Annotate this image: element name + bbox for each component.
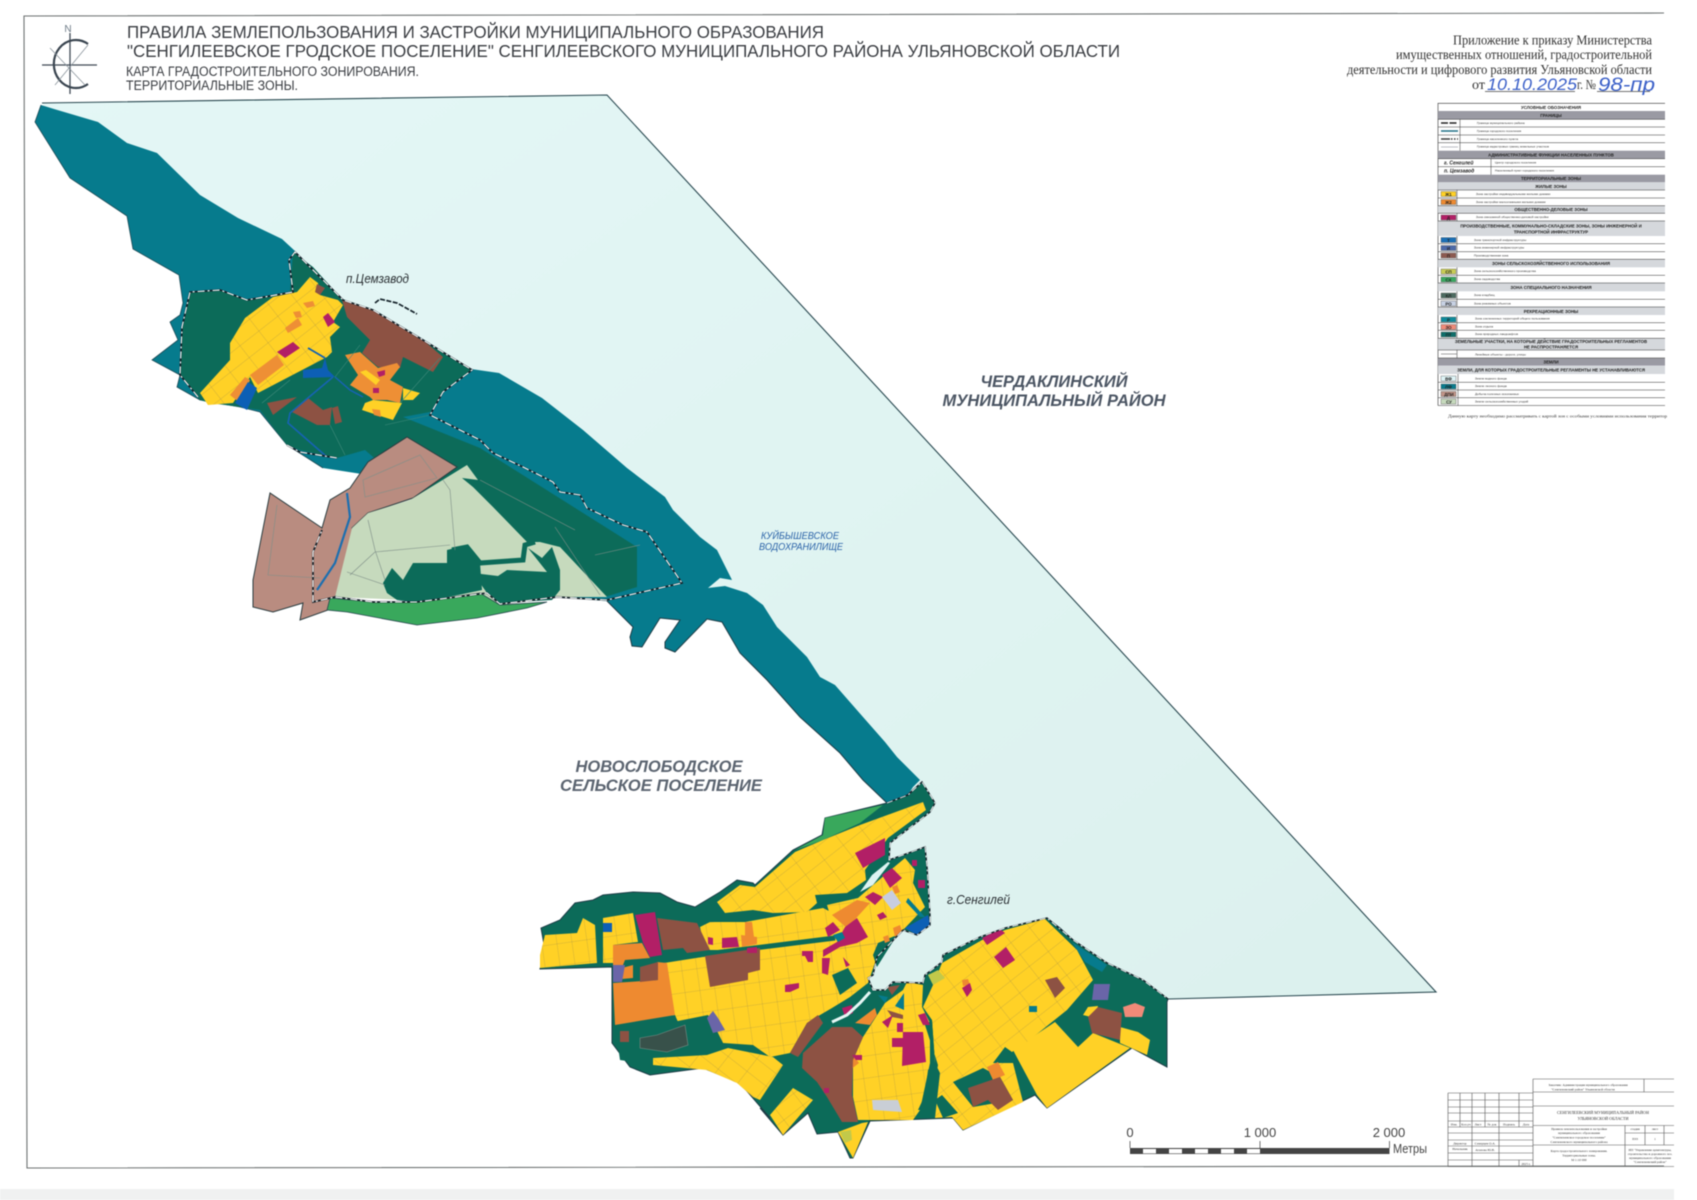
title block text: ИП "Управление архитектуры, bbox=[1628, 1148, 1672, 1153]
title block text: Дата bbox=[1523, 1122, 1530, 1126]
legend swatch codes: Ж1 bbox=[1444, 192, 1452, 197]
legend settlement names bbox=[1444, 160, 1474, 174]
legend swatch codes bbox=[1444, 192, 1454, 404]
legend descriptions: Линейные объекты - дороги, улицы bbox=[1475, 352, 1527, 356]
title block text: Заказчик: Администрация муниципального образования bbox=[1548, 1083, 1628, 1087]
legend headings: ЗЕМЕЛЬНЫЕ УЧАСТКИ, НА КОТОРЫЕ ДЕЙСТВИЕ ГРАДОСТРОИТЕЛЬНЫХ РЕГЛАМЕНТОВ bbox=[1455, 339, 1647, 344]
gardening zone north bbox=[795, 805, 883, 850]
legend settlement names: п. Цемзавод bbox=[1444, 168, 1474, 174]
river line through town bbox=[832, 992, 870, 1022]
river bbox=[317, 493, 350, 590]
logo compass mark: N bbox=[64, 24, 72, 35]
label: п.Цемзавод: п.Цемзавод bbox=[346, 271, 409, 286]
legend swatch codes: Ж2 bbox=[1444, 200, 1452, 205]
title block text: муниципального образования bbox=[1558, 1131, 1600, 1135]
legend swatch codes: Р bbox=[1447, 318, 1450, 322]
legend swatch codes: ДПИ bbox=[1444, 392, 1454, 397]
legend descriptions: Зона отдыха bbox=[1475, 324, 1493, 328]
title block text: 2025 г. bbox=[1521, 1162, 1531, 1166]
scale bar: 0 bbox=[1126, 1125, 1134, 1140]
legend swatch codes: И bbox=[1447, 246, 1450, 251]
title block text: М 1:10 000 bbox=[1571, 1158, 1587, 1162]
legend swatch codes: ВФ bbox=[1445, 376, 1452, 382]
legend swatch codes: СУ bbox=[1446, 400, 1452, 404]
title bbox=[126, 21, 1120, 93]
legend table bbox=[1438, 103, 1665, 406]
public crimson blocks bbox=[635, 838, 1015, 1093]
residential zone bbox=[200, 277, 343, 405]
label: г.Сенгилей: г.Сенгилей bbox=[947, 892, 1010, 907]
title block text: стадия bbox=[1630, 1127, 1640, 1131]
approval note: Приложение к приказу Министерства bbox=[1453, 34, 1653, 48]
access lines in south reserve bbox=[268, 455, 640, 595]
bottom scan band bbox=[0, 1189, 1674, 1200]
title block text: "Сенгилеевский район" bbox=[1633, 1160, 1667, 1164]
label: reservoir bbox=[759, 529, 844, 553]
legend headings: ЗЕМЛИ, ДЛЯ КОТОРЫХ ГРАДОСТРОИТЕЛЬНЫЕ РЕГЛАМЕНТЫ НЕ УСТАНАВЛИВАЮТСЯ bbox=[1457, 368, 1645, 372]
legend descriptions: Зона сельскохозяйственного производства bbox=[1474, 269, 1536, 273]
nature landscape zone bbox=[180, 252, 637, 597]
forest lobe west bbox=[383, 545, 482, 603]
label: Новослободское поселение: НОВОСЛОБОДСКОЕ bbox=[576, 757, 743, 776]
legend swatch codes: ЛФ bbox=[1445, 384, 1452, 390]
legend headings: УСЛОВНЫЕ ОБОЗНАЧЕНИЯ bbox=[1521, 105, 1581, 110]
legend descriptions: Граница населенного пункта bbox=[1477, 137, 1518, 141]
title block text bbox=[1451, 1083, 1672, 1166]
title block text: Сенгилеевского муниципального района bbox=[1550, 1140, 1608, 1144]
title block text: Самарцев О.А. bbox=[1475, 1142, 1496, 1146]
legend descriptions: Зона транспортной инфраструктуры bbox=[1474, 238, 1527, 242]
residential blocks bbox=[540, 802, 1150, 1158]
forest fund outer edge bbox=[607, 601, 887, 803]
title block text: Подпись bbox=[1503, 1122, 1516, 1126]
scale bar: 2 000 bbox=[1373, 1125, 1405, 1140]
legend descriptions bbox=[1474, 121, 1554, 404]
legend headings: РЕКРЕАЦИОННЫЕ ЗОНЫ bbox=[1524, 309, 1578, 314]
Сенгилей zones bbox=[540, 802, 1150, 1158]
legend descriptions: Добыча полезных ископаемых bbox=[1475, 392, 1519, 396]
approval note: 98-пр bbox=[1598, 75, 1655, 96]
title block text: строительства и дорожного хоз. bbox=[1628, 1152, 1672, 1156]
legend column lines bbox=[1457, 119, 1491, 406]
title block text: муниципального образования bbox=[1629, 1156, 1671, 1160]
label: Новослободское поселение bbox=[560, 757, 763, 795]
road bbox=[625, 938, 835, 964]
recreation pink block bbox=[1123, 1003, 1145, 1017]
brown production zone bbox=[342, 300, 443, 372]
legend descriptions: Граница муниципального района bbox=[1477, 121, 1525, 125]
title: ПРАВИЛА ЗЕМЛЕПОЛЬЗОВАНИЯ И ЗАСТРОЙКИ МУНИЦИПАЛЬНОГО ОБРАЗОВАНИЯ bbox=[127, 21, 824, 42]
title block text: Карта градостроительного зонирования. bbox=[1551, 1149, 1608, 1153]
label: Новослободское поселение: СЕЛЬСКОЕ ПОСЕЛЕНИЕ bbox=[560, 776, 763, 795]
street grids bbox=[540, 802, 1093, 1135]
brown production blocks bbox=[620, 918, 1122, 1122]
title block text: Изм. bbox=[1451, 1122, 1457, 1126]
title block text: лист bbox=[1652, 1127, 1659, 1131]
legend swatch codes: ПТ bbox=[1446, 332, 1452, 338]
title block text: Территориальные зоны. bbox=[1562, 1154, 1596, 1158]
legend colour swatches bbox=[1441, 192, 1456, 404]
approval note: от bbox=[1472, 78, 1485, 93]
title block text: СЕНГИЛЕЕВСКИЙ МУНИЦИПАЛЬНЫЙ РАЙОН bbox=[1557, 1110, 1649, 1115]
legend swatch codes: Т bbox=[1447, 238, 1450, 243]
approval note bbox=[1347, 34, 1655, 96]
legend headings: ЖИЛЫЕ ЗОНЫ bbox=[1534, 184, 1567, 189]
title block text: "Сенгилеевский район" Ульяновской области bbox=[1551, 1088, 1615, 1092]
legend headings: ТРАНСПОРТНОЙ ИНФРАСТРУКТУР bbox=[1514, 230, 1588, 234]
legend descriptions: Центр городского поселения bbox=[1495, 160, 1536, 164]
forest fund west edge bbox=[35, 105, 323, 468]
title: ТЕРРИТОРИАЛЬНЫЕ ЗОНЫ. bbox=[126, 78, 298, 93]
title block text: Начальник bbox=[1452, 1147, 1468, 1151]
label: Чердаклинский район: МУНИЦИПАЛЬНЫЙ РАЙОН bbox=[942, 390, 1166, 410]
drawing title block bbox=[1448, 1079, 1674, 1166]
gardening zone south bbox=[327, 593, 547, 625]
forest fund along the shore bbox=[35, 105, 920, 803]
title block text: Кол.уч bbox=[1461, 1122, 1471, 1126]
legend descriptions: Населенный пункт городского поселения bbox=[1495, 168, 1554, 172]
label: Чердаклинский район bbox=[942, 371, 1166, 410]
legend headings: ЗЕМЛИ bbox=[1543, 360, 1559, 364]
legend descriptions: Земли водного фонда bbox=[1475, 376, 1507, 380]
legend headings: ГРАНИЦЫ bbox=[1540, 113, 1562, 118]
inlet bbox=[860, 862, 890, 892]
orange residential bbox=[613, 885, 1005, 1080]
legend headings: АДМИНИСТРАТИВНЫЕ ФУНКЦИИ НАСЕЛЕННЫХ ПУНКТОВ bbox=[1488, 152, 1614, 158]
Сенгилей base area bbox=[540, 782, 1168, 1158]
title block text: ПЗЗ bbox=[1632, 1137, 1638, 1141]
public zones bbox=[277, 342, 300, 358]
legend swatch codes: П bbox=[1447, 254, 1450, 258]
legend descriptions: Зона застройки малоэтажными жилыми домами bbox=[1476, 200, 1546, 204]
legend descriptions: Зона инженерной инфраструктуры bbox=[1474, 246, 1525, 250]
legend descriptions: Зона кладбищ bbox=[1474, 293, 1495, 297]
legend settlement names: г. Сенгилей bbox=[1444, 160, 1473, 166]
approval note: имущественных отношений, градостроительной bbox=[1396, 48, 1652, 63]
legend row lines bbox=[1438, 119, 1665, 406]
legend headings: ОБЩЕСТВЕННО-ДЕЛОВЫЕ ЗОНЫ bbox=[1514, 207, 1588, 212]
title block text: № док bbox=[1488, 1122, 1497, 1126]
title: "СЕНГИЛЕЕВСКОЕ ГРОДСКОЕ ПОСЕЛЕНИЕ" СЕНГИЛЕЕВСКОГО МУНИЦИПАЛЬНОГО РАЙОНА УЛЬЯНОВСКОЙ ОБЛАСТИ bbox=[127, 40, 1120, 61]
scale bar bbox=[1126, 1125, 1427, 1156]
teal recreation blocks bbox=[833, 898, 1037, 1012]
title block text: Агапова Ю.В. bbox=[1475, 1148, 1495, 1152]
title block text: Лист bbox=[1475, 1122, 1482, 1126]
title block grid bbox=[1448, 1079, 1674, 1166]
legend headings: ЗОНА СПЕЦИАЛЬНОГО НАЗНАЧЕНИЯ bbox=[1510, 285, 1592, 290]
legend descriptions: Земли лесного фонда bbox=[1475, 384, 1507, 388]
stream bbox=[452, 542, 535, 563]
agricultural land bbox=[335, 465, 607, 604]
title block text: 1 bbox=[1654, 1137, 1656, 1141]
legend headings bbox=[1455, 105, 1647, 372]
legend descriptions: Зона смешанной общественно-деловой застройки bbox=[1476, 215, 1549, 219]
legend descriptions: Зона озелененных территорий общего пользования bbox=[1475, 316, 1550, 320]
scale bar: 1 000 bbox=[1244, 1125, 1276, 1140]
legend section bands bbox=[1438, 111, 1665, 374]
approval note: 10.10.2025 bbox=[1487, 76, 1578, 94]
legend descriptions: Граница кадастровых границ земельных участков bbox=[1477, 144, 1549, 148]
legend headings: ТЕРРИТОРИАЛЬНЫЕ ЗОНЫ bbox=[1521, 176, 1581, 181]
scale bar: Метры bbox=[1393, 1141, 1427, 1156]
legend headings: ЗОНЫ СЕЛЬСКОХОЗЯЙСТВЕННОГО ИСПОЛЬЗОВАНИЯ bbox=[1492, 261, 1610, 266]
legend line symbols bbox=[1441, 123, 1458, 354]
title block text: "Сенгилеевское городское поселение" bbox=[1552, 1136, 1606, 1140]
legend descriptions: Производственная зона bbox=[1474, 254, 1509, 258]
title block text: Правила землепользования и застройки bbox=[1551, 1127, 1607, 1131]
label: reservoir: ВОДОХРАНИЛИЩЕ bbox=[759, 541, 844, 553]
territorial zoning map bbox=[35, 95, 1436, 1158]
coastal teal band bbox=[1072, 942, 1107, 972]
title: КАРТА ГРАДОСТРОИТЕЛЬНОГО ЗОНИРОВАНИЯ. bbox=[126, 64, 419, 79]
transport and utility blocks bbox=[603, 915, 1110, 1033]
boundary of urban settlement, north bbox=[180, 252, 682, 604]
cemetery zone bbox=[640, 1025, 688, 1052]
disturbed land zone bbox=[253, 437, 457, 620]
approval note: г. № bbox=[1577, 78, 1596, 93]
legend descriptions: Граница городского поселения bbox=[1477, 129, 1522, 133]
legend headings: ПРОИЗВОДСТВЕННЫЕ, КОММУНАЛЬНО-СКЛАДСКИЕ ЗОНЫ, ЗОНЫ ИНЖЕНЕРНОЙ И bbox=[1460, 224, 1642, 228]
legend swatch codes: Д bbox=[1447, 216, 1451, 220]
boundary of urban settlement, Сенгилей coast bbox=[868, 782, 1168, 999]
legend swatch codes: РО bbox=[1445, 302, 1452, 306]
legend descriptions: Земли сельскохозяйственных угодий bbox=[1475, 400, 1528, 404]
legend swatch codes: КЛ bbox=[1446, 294, 1451, 298]
legend descriptions: Зона режимных объектов bbox=[1474, 302, 1511, 306]
transport zone bbox=[235, 382, 257, 410]
title block text: Директор bbox=[1453, 1142, 1467, 1146]
legend swatch codes: СП bbox=[1445, 270, 1452, 274]
residential orange bbox=[250, 355, 284, 385]
green patches bbox=[615, 932, 1013, 1118]
title block text: УЛЬЯНОВСКОЙ ОБЛАСТИ bbox=[1577, 1116, 1629, 1121]
legend footnote: Данную карту необходимо рассматривать с картой зон с особыми условиями использования территор bbox=[1448, 414, 1667, 418]
legend descriptions: Зона садоводства bbox=[1474, 277, 1500, 281]
boundary of settlement Цемзавод extension bbox=[375, 299, 417, 314]
legend descriptions: Зона природных ландшафтов bbox=[1475, 332, 1518, 336]
settlement Цемзавод zones bbox=[200, 277, 443, 457]
forest paths bbox=[262, 345, 440, 455]
legend swatch codes: ЗО bbox=[1445, 325, 1452, 330]
legend headings: НЕ РАСПРОСТРАНЯЕТСЯ bbox=[1524, 344, 1578, 350]
ponds and stream bbox=[303, 358, 335, 378]
approval note: деятельности и цифрового развития Ульяновской области bbox=[1347, 63, 1652, 78]
reservoir water area bbox=[42, 95, 1436, 1000]
small brown blocks bbox=[267, 397, 297, 415]
label: reservoir: КУЙБЫШЕВСКОЕ bbox=[761, 529, 840, 542]
south cluster bbox=[345, 352, 403, 403]
olive agricultural blocks bbox=[928, 970, 945, 985]
reservoir outer edge bbox=[42, 95, 1436, 999]
forest lobe east bbox=[473, 547, 560, 603]
legend descriptions: Зона застройки индивидуальными жилыми домами bbox=[1476, 192, 1551, 196]
logo compass mark bbox=[42, 24, 97, 94]
legend swatch codes: СХ bbox=[1446, 278, 1452, 282]
gray special blocks bbox=[872, 1100, 902, 1112]
label: Чердаклинский район: ЧЕРДАКЛИНСКИЙ bbox=[980, 371, 1128, 391]
